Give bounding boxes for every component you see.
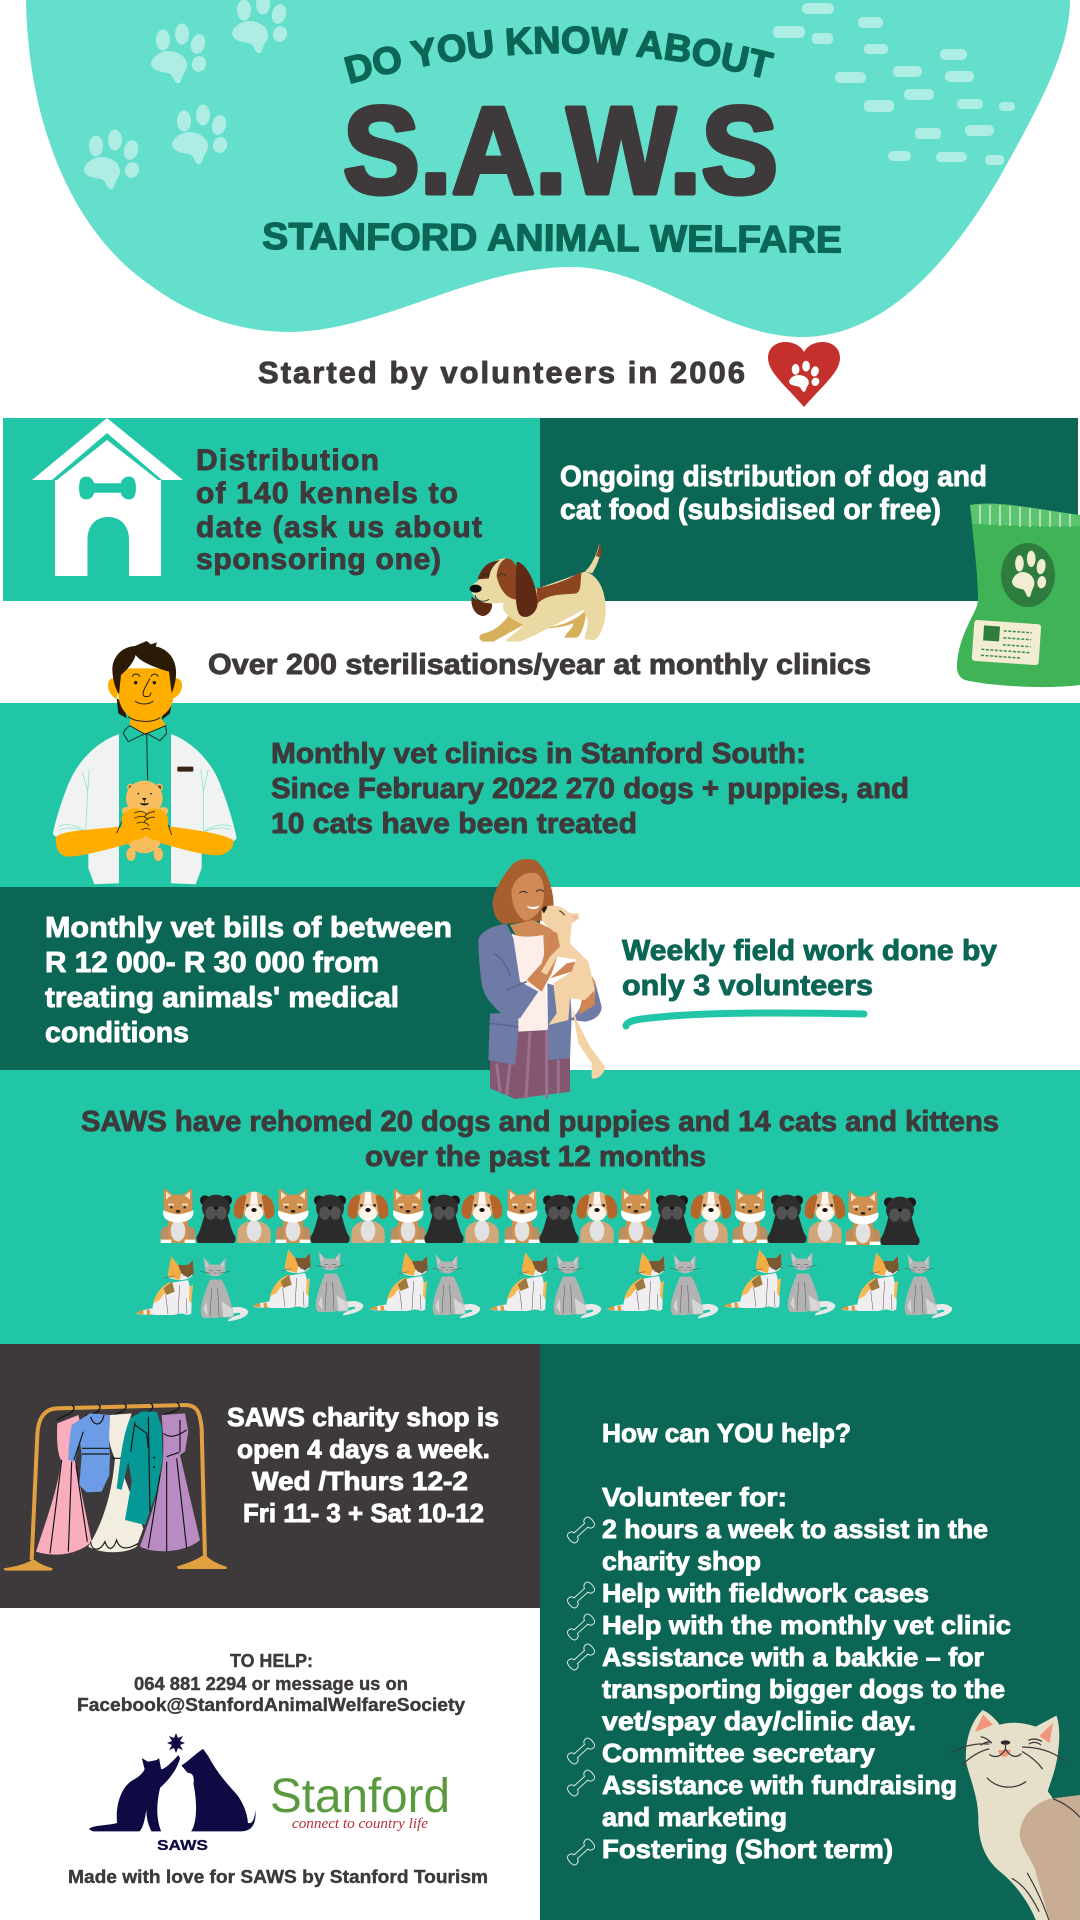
logo: SAWS cat and dog: SAWS (157, 1837, 208, 1854)
help panel (540, 1344, 1080, 1920)
text: vet bills: Monthly vet bills of between (45, 912, 452, 944)
text: charity shop hours: Wed /Thurs 12-2 (252, 1466, 468, 1496)
top teal band: kennels (3, 418, 540, 601)
rehomed band (0, 1070, 1080, 1344)
title: S.A.W.S: S.A.W.S (343, 83, 778, 220)
text: contact details: Facebook@StanfordAnimalWelfareSociety (77, 1695, 465, 1715)
bone bullets (566, 1515, 596, 1867)
text: kennels: of 140 kennels to (196, 477, 458, 510)
text: vet clinics: Monthly vet clinics in Stanford South: (271, 738, 806, 770)
text: kennels: date (ask us about (196, 511, 482, 544)
text: charity shop hours (227, 1402, 499, 1528)
logo: Stanford: Stanford (270, 1770, 450, 1823)
left paw prints (84, 0, 289, 189)
text: food distribution (560, 461, 987, 526)
help items: and marketing (602, 1802, 787, 1832)
help items: Fostering (Short term) (602, 1834, 893, 1864)
help heading: Volunteer for: (602, 1482, 787, 1512)
text: charity shop hours: Fri 11- 3 + Sat 10-12 (243, 1498, 484, 1528)
logo: SAWS cat and dog (89, 1733, 256, 1854)
illustration: woman hugging cat (478, 859, 605, 1099)
text: vet bills: R 12 000- R 30 000 from (45, 947, 379, 979)
text: vet clinics: 10 cats have been treated (271, 808, 637, 840)
text: kennels (196, 444, 482, 576)
help items: charity shop (602, 1546, 761, 1576)
icon: dog kennel (32, 418, 183, 576)
text: field work (622, 935, 997, 1002)
header blob (26, 0, 1070, 337)
text: contact details (77, 1651, 465, 1715)
credit line: Made with love for SAWS by Stanford Tourism (68, 1867, 488, 1887)
help items: Assistance with a bakkie – for (602, 1642, 984, 1672)
text: rehomed animals (81, 1106, 999, 1173)
help items: Assistance with fundraising (602, 1770, 957, 1800)
help items: Help with the monthly vet clinic (602, 1610, 1011, 1640)
illustration: happy cat (951, 1710, 1080, 1920)
charity shop band (0, 1344, 540, 1608)
help items: 2 hours a week to assist in the (602, 1514, 988, 1544)
icon: heart with paw (768, 342, 840, 407)
help heading: How can YOU help? (602, 1418, 851, 1448)
illustration: playful dog (470, 543, 606, 642)
subtitle: STANFORD ANIMAL WELFARE (262, 216, 842, 262)
text: rehomed animals: SAWS have rehomed 20 dogs and puppies and 14 cats and kittens (81, 1106, 999, 1138)
illustration: clothes rack (3, 1402, 227, 1571)
text: charity shop hours: SAWS charity shop is (227, 1402, 499, 1432)
text: vet bills: conditions (45, 1017, 189, 1049)
text: field work: Weekly field work done by (622, 935, 997, 967)
text: charity shop hours: open 4 days a week. (237, 1434, 490, 1464)
illustration: green pet food bag (957, 504, 1080, 687)
text: vet bills (45, 912, 452, 1049)
text: vet clinics: Since February 2022 270 dogs + puppies, and (271, 773, 909, 805)
text: kennels: Distribution (196, 444, 379, 477)
vet bills band (0, 887, 540, 1070)
heading: do you know about: DO YOU KNOW ABOUT (344, 26, 775, 84)
text: field work: only 3 volunteers (622, 970, 873, 1002)
text: vet clinics (271, 738, 909, 840)
row of fourteen cats (136, 1250, 952, 1321)
right paw smudges (773, 3, 1015, 165)
help items (602, 1514, 1011, 1864)
clinic band (0, 703, 1080, 887)
brush underline (626, 1013, 864, 1026)
text: food distribution: Ongoing distribution of dog and (560, 461, 987, 493)
text: sterilisations: Over 200 sterilisations/year at monthly clinics (208, 649, 871, 681)
logo: Stanford: connect to country life (292, 1816, 428, 1832)
help items: vet/spay day/clinic day. (602, 1706, 916, 1736)
help heading (602, 1418, 851, 1512)
text: contact details: 064 881 2294 or message us on (134, 1674, 408, 1694)
help list (602, 1418, 1011, 1864)
text: food distribution: cat food (subsidised or free) (560, 494, 941, 526)
help items: transporting bigger dogs to the (602, 1674, 1005, 1704)
help items: Help with fieldwork cases (602, 1578, 929, 1608)
text: contact details: TO HELP: (230, 1651, 313, 1671)
text: vet bills: treating animals' medical (45, 982, 399, 1014)
illustration: vet holding hamster (53, 641, 237, 884)
text: kennels: sponsoring one) (196, 543, 441, 576)
text: rehomed animals: over the past 12 months (365, 1141, 706, 1173)
help items: Committee secretary (602, 1738, 876, 1768)
row of twenty dogs (161, 1188, 920, 1245)
started by volunteers: Started by volunteers in 2006 (258, 355, 745, 390)
top dark band: food (540, 418, 1078, 601)
